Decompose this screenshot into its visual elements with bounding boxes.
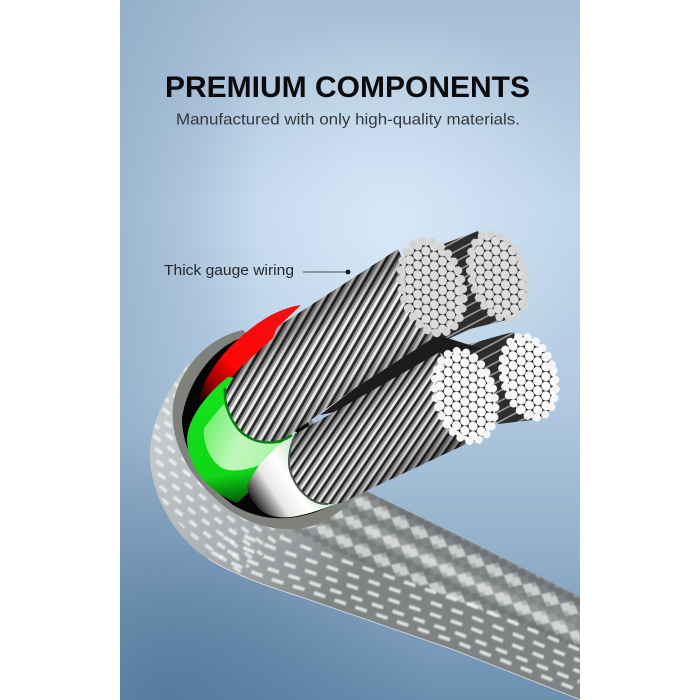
dark cable interior: [182, 335, 337, 518]
callout: thick gauge wiring: [164, 263, 350, 279]
jacket: brushed flecks on the bend: [150, 367, 286, 574]
jacket: flat weave flecks following the bend: [212, 530, 580, 691]
subtitle: Manufactured with only high-quality materials.: [176, 112, 520, 128]
green wire: [187, 377, 294, 503]
wire end face, back lower: [493, 330, 565, 424]
callout dot: [346, 270, 350, 274]
sheath rim, white: [289, 433, 328, 504]
jacket: bright lower edge: [208, 559, 580, 700]
background panel: [120, 0, 580, 700]
wire end face, front upper: [391, 234, 473, 340]
callout leader line: [303, 271, 348, 273]
green wire highlight: [204, 404, 288, 470]
jacket: diamond weave on the upper straight section: [290, 480, 580, 650]
title: PREMIUM COMPONENTS: [165, 71, 530, 104]
copper strands, upper front wire: [225, 249, 438, 442]
braided cable jacket: [140, 350, 580, 700]
callout text: Thick gauge wiring: [164, 263, 294, 279]
sheath rim, green: [225, 388, 292, 442]
cut ring of the jacket: [173, 330, 356, 529]
white wire: [247, 431, 352, 517]
dark gap between wires: [320, 335, 482, 415]
back wire, lower: [440, 332, 532, 424]
wire end face, back upper: [459, 226, 537, 326]
jacket: soft bright band: [370, 530, 580, 630]
jacket: base colour: [140, 350, 580, 700]
copper strands, lower front wire: [289, 352, 466, 504]
wire end face, front lower: [425, 344, 505, 448]
back wire, upper: [400, 231, 506, 352]
red wire: [198, 305, 301, 402]
